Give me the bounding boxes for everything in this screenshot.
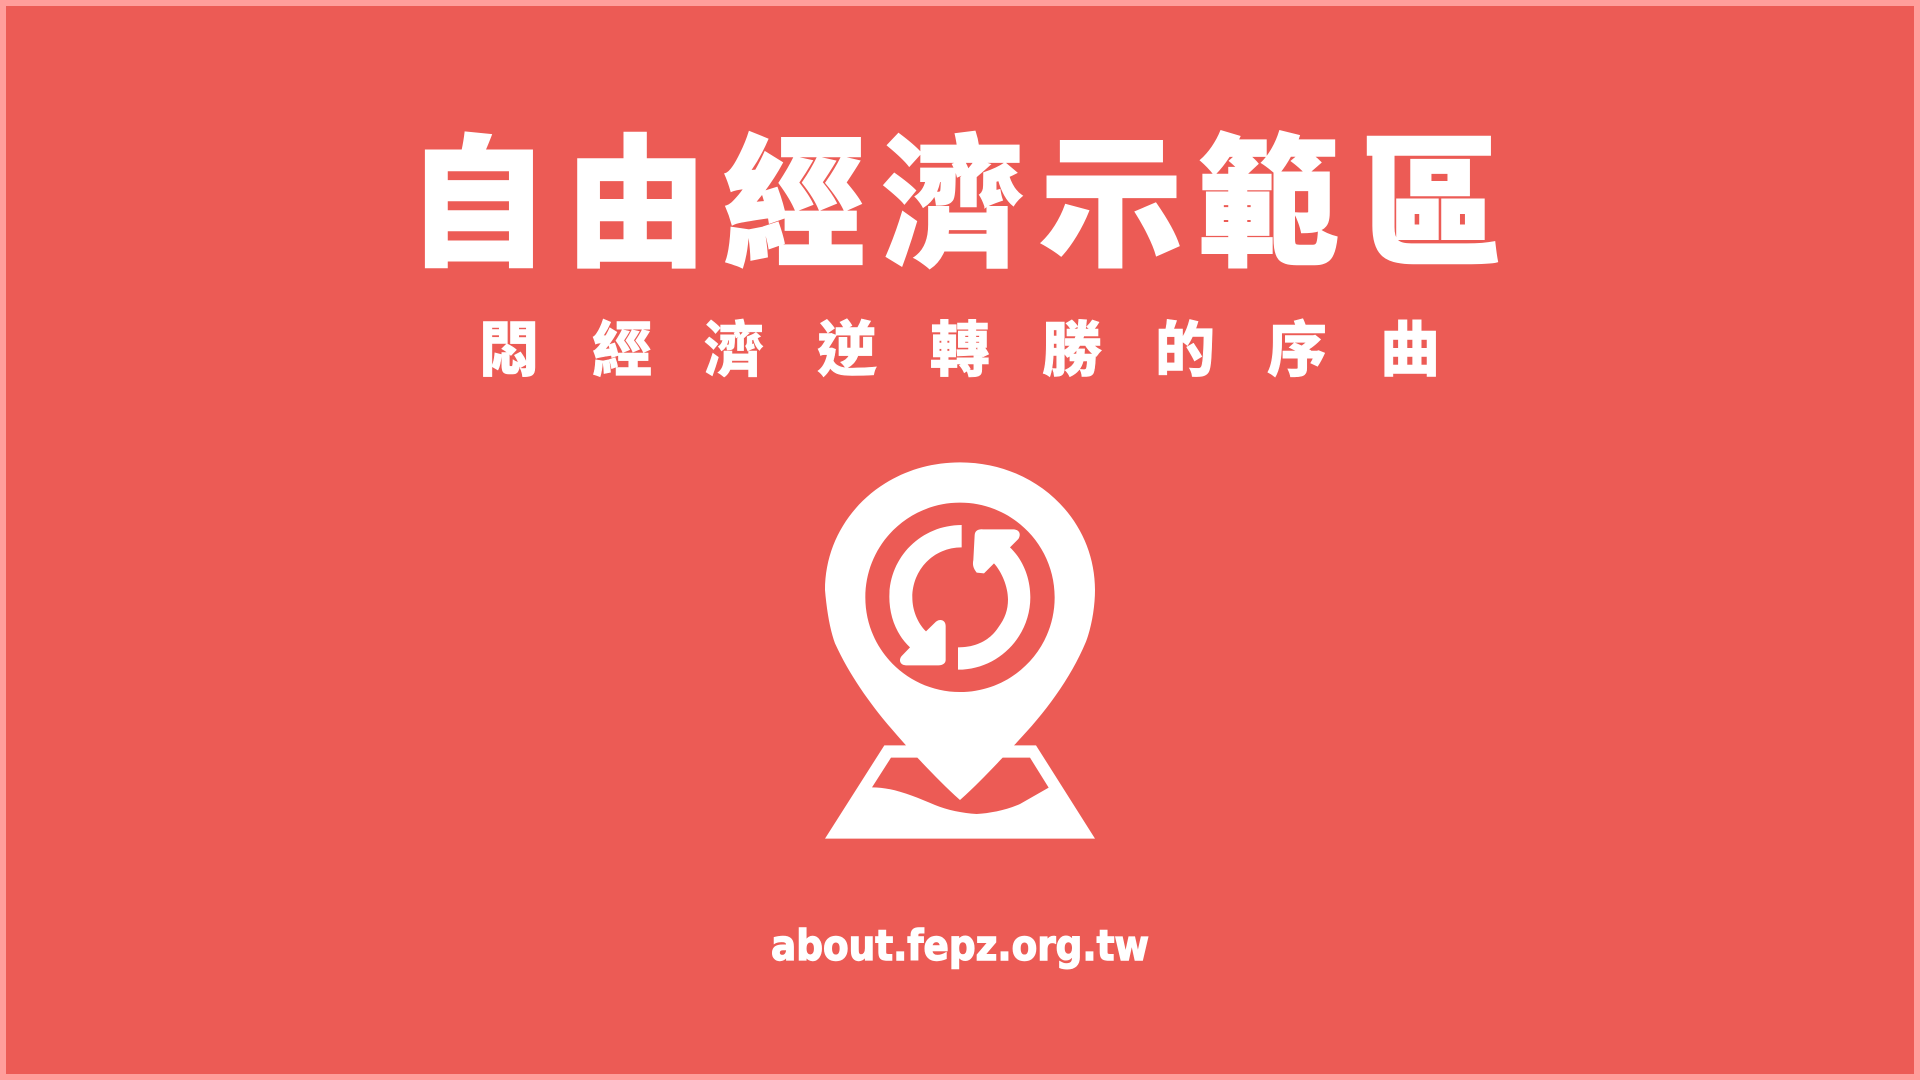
subtitle: 悶經濟逆轉勝的序曲	[479, 317, 1440, 384]
icon: left refresh arrow	[889, 525, 962, 665]
website url: about.fepz.org.tw	[771, 921, 1149, 970]
icon: right refresh arrow	[958, 529, 1030, 670]
title: 自由經濟示範區	[407, 126, 1502, 285]
icon: map pin with refresh arrows	[825, 462, 1095, 839]
icon: pin and map base	[825, 462, 1095, 839]
